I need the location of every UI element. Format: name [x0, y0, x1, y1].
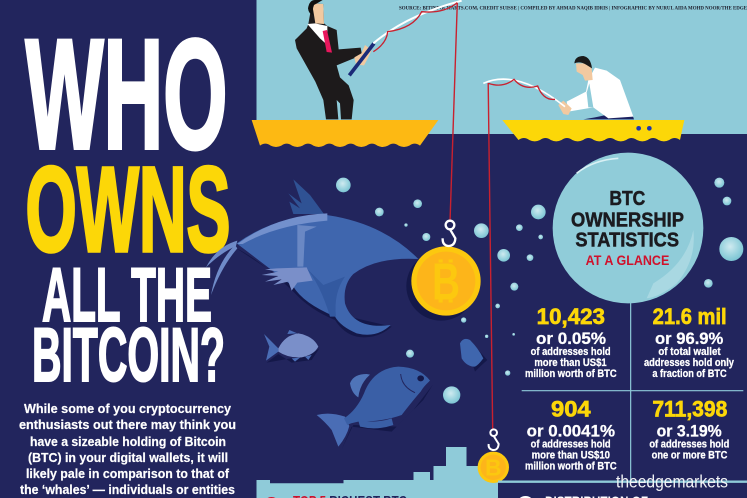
intro paragraph: enthusiasts out there may think you	[19, 417, 236, 432]
bubbles: around fish	[336, 178, 510, 404]
heading: BTC ownership statistics: BTC	[609, 188, 645, 210]
fishing rod: large	[349, 1, 462, 75]
intro paragraph: the ‘whales’ — individuals or entities	[20, 482, 235, 497]
stat: 711,398: one or more BTC	[652, 449, 728, 461]
stats grid lines	[522, 302, 743, 481]
intro paragraph	[19, 401, 236, 497]
stat: 904: more than US$10	[532, 449, 610, 461]
title line: BITCOIN?: BITCOIN?	[32, 313, 225, 398]
intro paragraph: have a sizeable holding of Bitcoin	[30, 434, 226, 449]
stat: 711,398	[649, 397, 729, 461]
stat: 10,423: 10,423	[537, 304, 605, 329]
heading: BTC ownership statistics: OWNERSHIP	[571, 210, 684, 232]
stat: 10,423	[525, 304, 617, 380]
stat: 21.6 mil: addresses hold only	[644, 357, 734, 369]
stat: 10,423: million worth of BTC	[525, 368, 617, 380]
stat: 10,423: or 0.05%	[536, 329, 606, 348]
stat: 711,398: or 3.19%	[657, 421, 722, 440]
small coin	[478, 452, 509, 483]
panel: top 5 richest (skyline)	[256, 447, 498, 498]
stat: 21.6 mil: or 96.9%	[655, 329, 724, 348]
small fish: left	[264, 330, 319, 363]
fisherman: man in white shirt	[558, 56, 634, 119]
sky panel	[256, 0, 747, 134]
stat: 904: million worth of BTC	[525, 460, 617, 472]
scene: fish and bubbles	[206, 178, 510, 450]
watermark: theedgemarkets	[616, 472, 728, 492]
boat portholes	[636, 126, 652, 131]
stats section	[510, 153, 743, 481]
stat: 904	[525, 397, 617, 472]
small coin: B	[485, 454, 502, 480]
big shark-like fish	[206, 179, 418, 337]
stat: 21.6 mil: of total wallet	[658, 346, 721, 358]
title	[26, 8, 230, 398]
distribution icon	[516, 496, 534, 498]
stat: 904: 904	[551, 397, 591, 422]
intro paragraph: (BTC) in your digital wallets, it will	[28, 450, 228, 465]
title line: ALL THE: ALL THE	[42, 253, 212, 338]
fishing line: short	[488, 83, 493, 430]
title line: OWNS: OWNS	[26, 141, 230, 277]
heading: BTC ownership statistics	[571, 188, 684, 252]
stat: 21.6 mil: a fraction of BTC	[652, 368, 727, 380]
subheading: at a glance: AT A GLANCE	[586, 252, 669, 268]
fisherman: man in black suit	[295, 0, 372, 119]
stat: 904: of addresses hold	[531, 438, 611, 450]
small coin hook	[489, 429, 499, 450]
stat: 10,423: more than US$1	[534, 357, 607, 369]
boat: small yellow	[502, 120, 684, 141]
bubbles: around stats	[510, 178, 743, 336]
fishing rod: small	[483, 79, 565, 107]
big bubble with heading	[553, 153, 703, 303]
panel icon	[264, 497, 280, 498]
stat: 21.6 mil: 21.6 mil	[653, 304, 727, 329]
panel: distribution	[498, 482, 747, 498]
title line: WHO: WHO	[26, 8, 228, 182]
stat: 10,423: of addresses hold	[531, 346, 611, 358]
scene: boats and fishermen	[252, 0, 684, 147]
boat: large orange	[252, 120, 438, 147]
heading: BTC ownership statistics: STATISTICS	[575, 230, 679, 252]
stat: 711,398: 711,398	[652, 397, 727, 422]
large fish: bottom	[317, 367, 433, 449]
large coin with hook: B	[432, 252, 460, 310]
intro paragraph: While some of you cryptocurrency	[24, 401, 232, 416]
stat: 711,398: of addresses hold	[649, 438, 729, 450]
stat: 904: or 0.0041%	[527, 421, 615, 440]
intro paragraph: likely pale in comparison to that of	[26, 466, 230, 481]
stat: 21.6 mil	[644, 304, 734, 380]
small fish: right	[460, 339, 487, 372]
large coin with hook	[406, 221, 481, 321]
fishing line: long	[450, 3, 457, 222]
